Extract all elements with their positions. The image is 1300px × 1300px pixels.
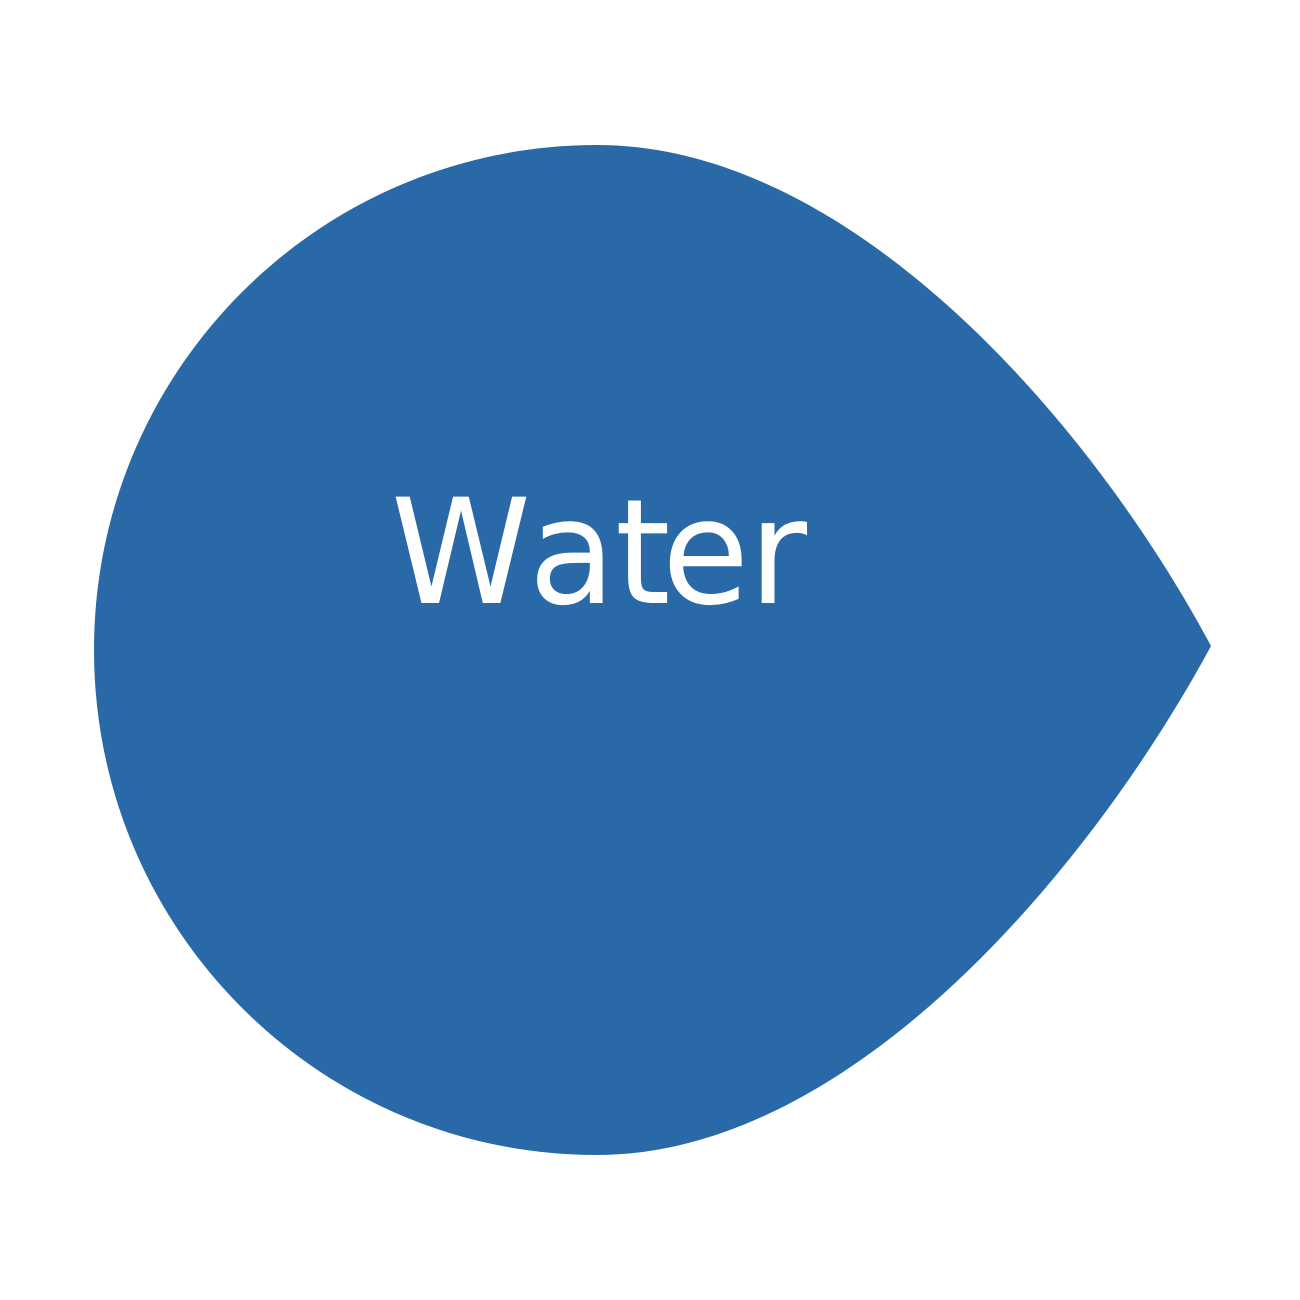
title: Water: Water xyxy=(391,468,808,638)
icon: water drop xyxy=(94,145,1211,1155)
